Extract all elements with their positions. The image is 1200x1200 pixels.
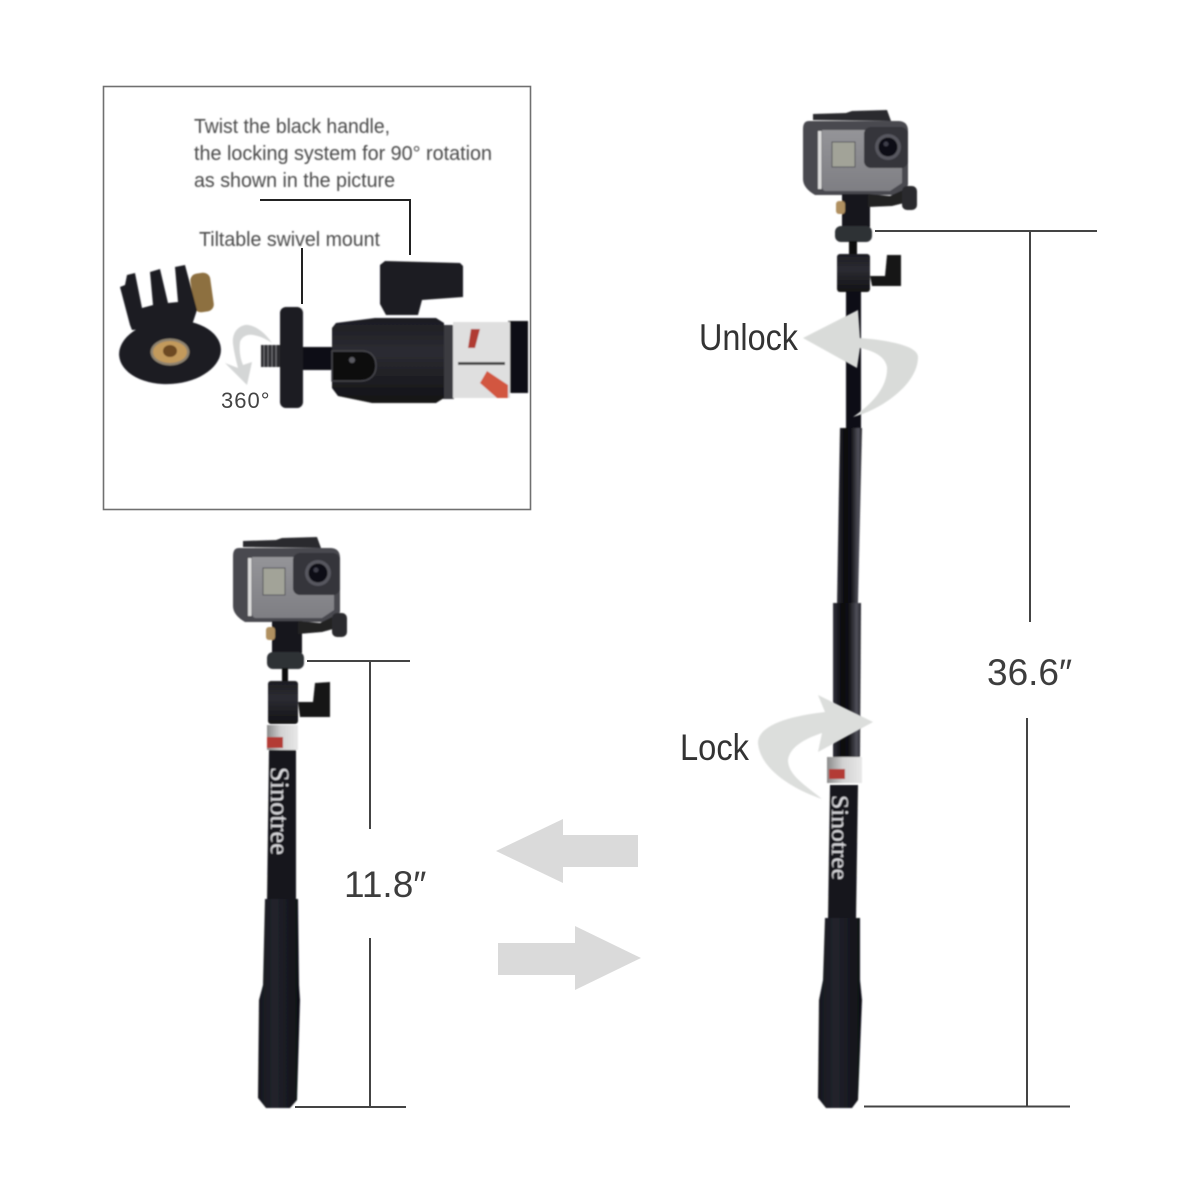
label: 360 degrees: 360° bbox=[221, 388, 271, 413]
dimension: extended length bbox=[864, 231, 1097, 1107]
locking ring bbox=[267, 725, 298, 750]
leader line to handle bbox=[260, 200, 410, 255]
mount disc, rod and screw bbox=[261, 307, 350, 408]
panel: swivel mount detail bbox=[104, 86, 530, 510]
camera mount and thumb screw bbox=[266, 613, 347, 682]
icon: 360 degree rotation arrow bbox=[225, 325, 272, 385]
camera mount and thumb screw bbox=[835, 186, 917, 256]
ball joint slot bbox=[332, 351, 376, 381]
arrow: lock rotation bbox=[758, 695, 873, 799]
arrow: collapse bbox=[496, 819, 638, 883]
ball head close-up bbox=[261, 261, 528, 408]
locking handle bbox=[380, 261, 463, 315]
icon: action camera bbox=[233, 537, 340, 622]
pole shaft bbox=[267, 750, 296, 902]
foam grip bbox=[258, 899, 300, 1108]
ball joint body bbox=[332, 318, 444, 403]
arrow: extend bbox=[498, 926, 641, 990]
instruction text: twist the handle: the locking system for 90° rotation bbox=[194, 143, 492, 165]
ball head with handle bbox=[837, 254, 901, 292]
label: unlock: Unlock bbox=[699, 317, 798, 358]
instruction text: twist the handle bbox=[194, 116, 492, 192]
foam grip bbox=[818, 918, 862, 1108]
right pole: extended with camera bbox=[803, 110, 917, 1108]
brand name: Sinotree bbox=[265, 767, 294, 855]
leader line to mount disc bbox=[301, 248, 303, 304]
dimension: collapsed length bbox=[295, 661, 426, 1107]
left pole: collapsed with camera bbox=[233, 537, 347, 1108]
label: tiltable swivel mount: Tiltable swivel mount bbox=[199, 229, 380, 251]
icon: action camera bbox=[803, 110, 908, 195]
arrow: unlock rotation bbox=[803, 310, 918, 417]
locking ring bbox=[827, 757, 862, 783]
instruction text: twist the handle: Twist the black handle, bbox=[194, 116, 390, 138]
pole shaft sections bbox=[828, 290, 862, 920]
ball head with handle bbox=[268, 681, 330, 724]
instruction text: twist the handle: as shown in the picture bbox=[194, 170, 395, 192]
brand name: Sinotree bbox=[826, 795, 852, 880]
pole with warning label bbox=[443, 321, 528, 399]
label: 36.6 inches: 36.6″ bbox=[987, 652, 1072, 693]
label: 11.8 inches: 11.8″ bbox=[344, 864, 426, 905]
icon: camera adapter with brass insert bbox=[117, 265, 223, 387]
label: lock: Lock bbox=[680, 727, 749, 768]
